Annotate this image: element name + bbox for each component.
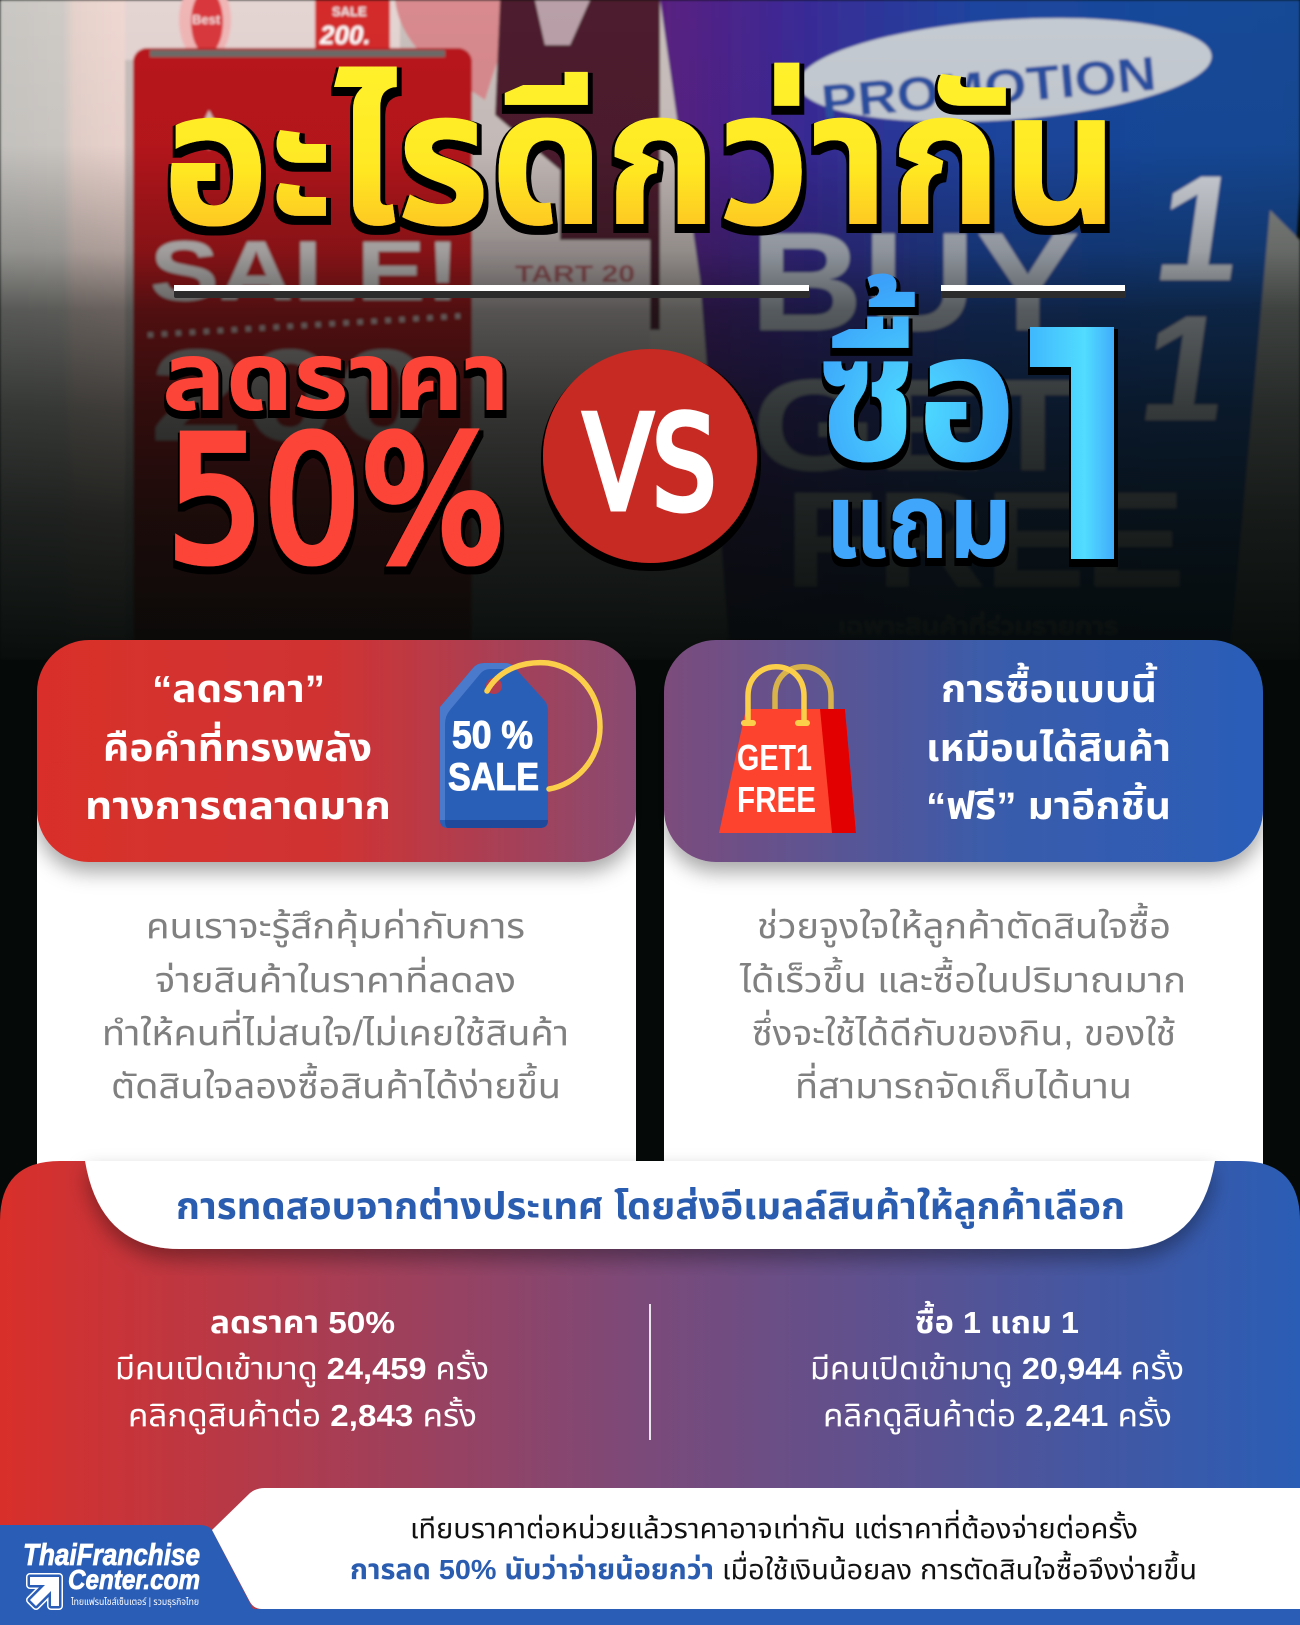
background photo collage: Best — [192, 12, 221, 27]
results: buy one get one: ซื้อ 1 แถม 1 — [915, 1300, 1079, 1340]
background photo collage — [0, 0, 1300, 688]
panel body text: buy one get one: ได้เร็วขึ้น และซื้อในปริมาณมาก — [739, 956, 1186, 1000]
icon: sale tag — [440, 663, 600, 828]
panel header: buy one get one: “ฟรี” มาอีกชิ้น — [926, 781, 1171, 828]
panel header: discount: ทางการตลาดมาก — [85, 786, 391, 828]
results: discount — [115, 1305, 489, 1434]
panel header: discount: คือคำที่ทรงพลัง — [103, 721, 372, 770]
icon: arrow — [30, 1577, 59, 1606]
panel body text: discount: จ่ายสินค้าในราคาที่ลดลง — [155, 956, 516, 1000]
background photo collage: 200. — [319, 20, 371, 50]
background photo collage: TART 20 — [515, 261, 635, 288]
panel body text: discount: ทำให้คนที่ไม่สนใจ/ไม่เคยใช้สินค้า — [102, 1009, 569, 1053]
divider — [649, 1304, 651, 1440]
background photo collage: PROMOTION — [819, 48, 1158, 130]
background photo collage: 1 — [1131, 285, 1238, 452]
panel header: buy one get one — [664, 640, 1263, 862]
panel header: discount: “ลดราคา” — [152, 669, 325, 711]
VS badge — [543, 349, 757, 563]
results: discount: ลดราคา 50% — [210, 1305, 395, 1340]
panel body text: buy one get one — [739, 902, 1186, 1106]
icon: shopping bag: FREE — [737, 779, 816, 820]
background photo collage: 1 — [1146, 145, 1253, 312]
logo: ThaiFranchise Center.com: ไทยแฟรนไชส์เซ็นเตอร์ | รวมธุรกิจไทย — [70, 1595, 199, 1608]
test heading: การทดสอบจากต่างประเทศ โดยส่งอีเมลล์สินค้าให้ลูกค้าเลือก — [176, 1186, 1125, 1229]
title underline left — [174, 285, 810, 298]
background photo collage: SALE — [332, 4, 367, 19]
logo: ThaiFranchise Center.com: Center.com — [68, 1564, 200, 1595]
footer conclusion: การลด 50% นับว่าจ่ายน้อยกว่า เมื่อใช้เงินน้อยลง การตัดสินใจซื้อจึงง่ายขึ้น — [350, 1550, 1197, 1585]
left headline: discount 50% — [162, 323, 510, 601]
panel: overseas test results — [0, 1161, 1300, 1625]
results: buy one get one — [810, 1300, 1184, 1434]
results: discount: คลิกดูสินค้าต่อ 2,843 ครั้ง — [128, 1396, 477, 1434]
icon: shopping bag: GET1 — [737, 737, 812, 778]
background photo collage: GET — [752, 352, 1082, 498]
background photo collage: 200 — [150, 322, 430, 468]
logo: ThaiFranchise Center.com: ThaiFranchise — [23, 1537, 200, 1572]
panel header: buy one get one: เหมือนได้สินค้า — [926, 728, 1171, 770]
test heading — [85, 1161, 1215, 1249]
results: buy one get one: มีคนเปิดเข้ามาดู 20,944 ครั้ง — [810, 1349, 1184, 1387]
footer conclusion: เทียบราคาต่อหน่วยแล้วราคาอาจเท่ากัน แต่ราคาที่ต้องจ่ายต่อครั้ง — [410, 1509, 1138, 1544]
icon: shopping bag — [719, 667, 856, 833]
right headline: buy 1 get 1: ซื้อ — [817, 273, 1016, 499]
logo panel and footer strip — [0, 1525, 1300, 1625]
panel body text: discount: คนเราจะรู้สึกคุ้มค่ากับการ — [146, 907, 525, 947]
panel body text: discount — [102, 907, 569, 1106]
left headline: discount 50%: ลดราคา — [162, 323, 510, 430]
icon: sale tag: 50 % — [452, 714, 533, 757]
panel: buy one get one — [664, 640, 1263, 1240]
panel body text: buy one get one: ซึ่งจะใช้ได้ดีกับของกิน, ของใช้ — [752, 1009, 1176, 1053]
panel body text: buy one get one: ช่วยจูงใจให้ลูกค้าตัดสินใจซื้อ — [757, 902, 1171, 947]
panel header: discount — [37, 640, 636, 862]
panel body text: buy one get one: ที่สามารถจัดเก็บได้นาน — [795, 1062, 1132, 1106]
right headline: buy 1 get 1: แถม — [825, 463, 1012, 581]
footer conclusion — [212, 1488, 1300, 1609]
panel header: buy one get one: การซื้อแบบนี้ — [941, 662, 1158, 711]
panel: discount — [37, 640, 636, 1240]
background photo collage: BUY — [750, 203, 1080, 360]
logo: ThaiFranchise Center.com — [23, 1537, 200, 1608]
background photo collage: SALE! — [150, 224, 460, 318]
panel body text: discount: ตัดสินใจลองซื้อสินค้าได้ง่ายขึ้น — [111, 1062, 561, 1106]
right headline: buy 1 get 1 — [817, 273, 1114, 581]
VS badge: VS — [584, 390, 716, 539]
results: buy one get one: คลิกดูสินค้าต่อ 2,241 ครั้ง — [823, 1396, 1172, 1434]
left headline: discount 50%: 50% — [167, 400, 505, 601]
icon: sale tag: SALE — [448, 756, 539, 799]
title underline right — [941, 285, 1126, 298]
background photo collage: เฉพาะสินค้าที่ร่วมรายการ — [838, 611, 1118, 639]
title: อะไรดีกว่ากัน — [162, 52, 1119, 264]
results: discount: มีคนเปิดเข้ามาดู 24,459 ครั้ง — [115, 1349, 489, 1387]
background photo collage: FREE — [785, 464, 1185, 615]
